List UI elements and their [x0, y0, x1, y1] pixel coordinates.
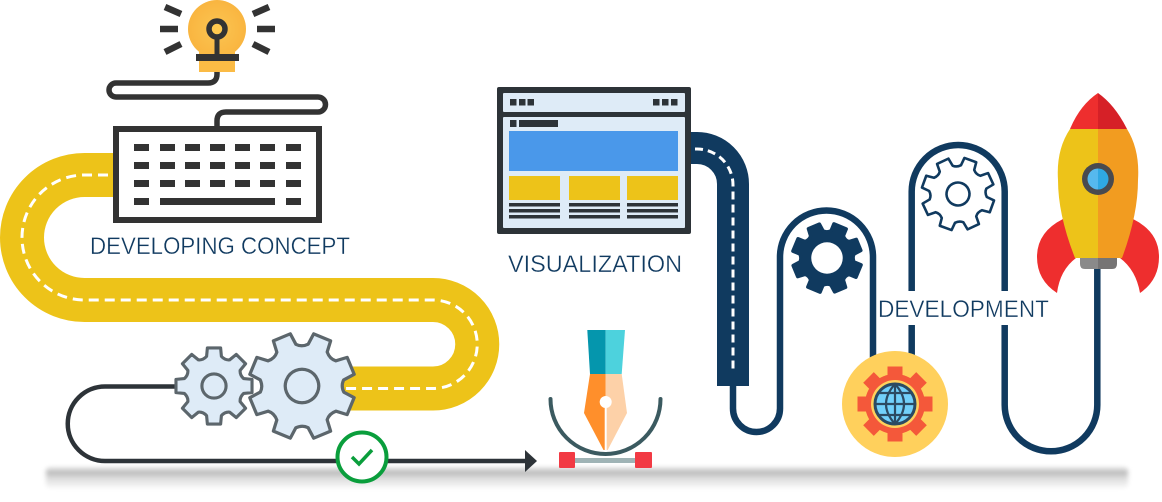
icon: light bulb: [160, 0, 275, 72]
thin navy line loops: [733, 145, 1097, 451]
icon: browser window: [497, 87, 691, 234]
icon: solid navy gear: [782, 213, 872, 303]
icon: large gear: [233, 317, 371, 455]
dark line with arrow: [68, 386, 537, 472]
icon: green check: [338, 432, 386, 482]
icon: outlined navy gear: [912, 148, 1004, 240]
icon: globe gear badge: [842, 351, 948, 457]
label: developing concept: DEVELOPING CONCEPT: [90, 233, 350, 260]
label: development: DEVELOPMENT: [878, 296, 1049, 323]
cable from bulb to keyboard: [109, 72, 326, 127]
icon: rocket: [1037, 93, 1159, 293]
label: visualization: VISUALIZATION: [508, 251, 682, 278]
icon: small gear: [176, 348, 252, 424]
yellow road: [22, 175, 477, 388]
icon: keyboard: [116, 129, 319, 220]
ground shadow: [46, 465, 1128, 490]
navy road: [688, 148, 733, 386]
icon: pen tool: [550, 330, 660, 468]
